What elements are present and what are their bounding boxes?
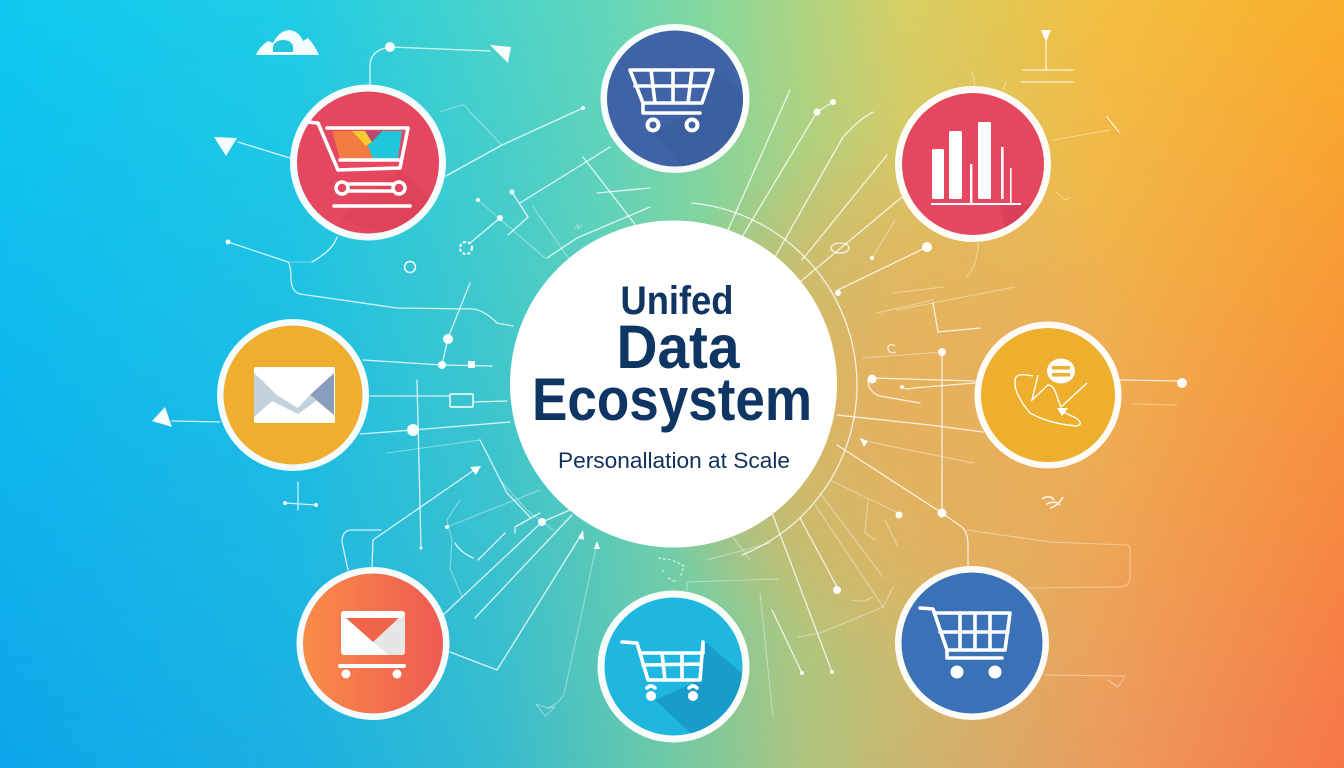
- node: red bar chart: [895, 86, 1051, 242]
- node: blue shopping cart top: [600, 24, 760, 175]
- small decorative icons: [256, 30, 1063, 582]
- node: orange mail cart: [296, 567, 450, 720]
- icon: dotted cluster: [658, 558, 684, 582]
- node: yellow signal: [974, 322, 1122, 468]
- connector lines network: [172, 32, 1182, 717]
- icon: hollow ring: [404, 262, 416, 272]
- node: red shopping cart: [290, 84, 446, 240]
- icon: knot doodle: [831, 243, 849, 253]
- node: cyan shopping cart: [598, 590, 750, 742]
- title: Unified: Unifed: [620, 279, 734, 323]
- icon: small doodle: [460, 242, 472, 254]
- icon: small card: [450, 394, 473, 407]
- centre hub circle: [510, 220, 837, 548]
- icon: cloud: [256, 30, 319, 55]
- icon: swirl doodle: [1042, 497, 1063, 508]
- icon: g doodle: [888, 345, 896, 353]
- node: blue shopping cart right: [895, 566, 1049, 720]
- title: Data: Data: [616, 313, 740, 381]
- connector nodes and small arrows: [152, 30, 1187, 675]
- subtitle: Personallation at Scale: [558, 448, 790, 473]
- node: yellow envelope: [217, 319, 369, 471]
- title: Ecosystem: Ecosystem: [532, 366, 812, 433]
